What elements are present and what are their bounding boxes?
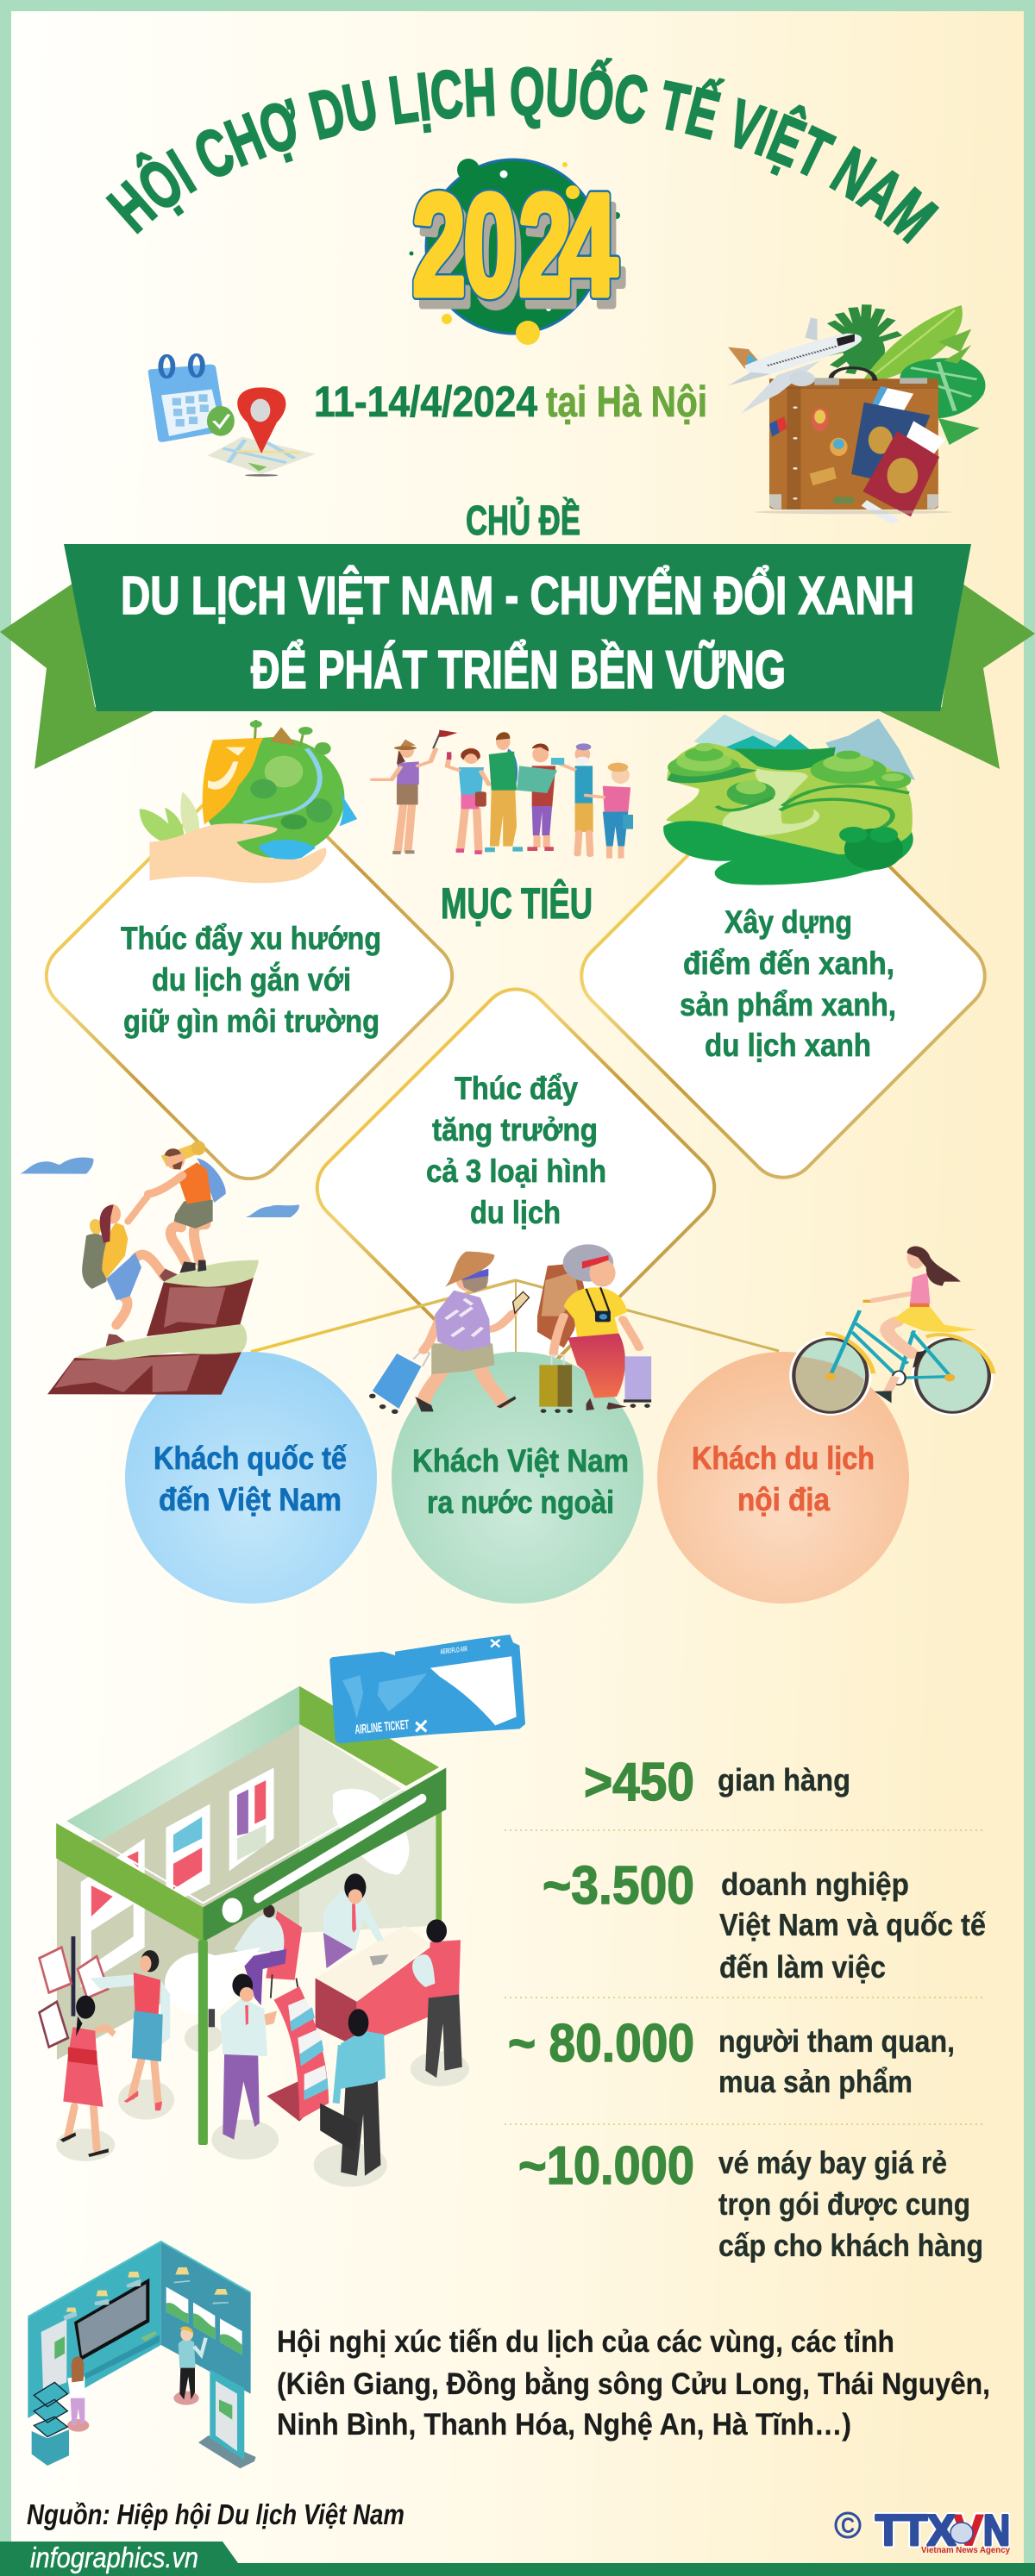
stat: businesses: doanh nghiệp: [721, 1866, 909, 1902]
shelf: [32, 2382, 69, 2466]
desk: [316, 1925, 430, 2047]
stat: visitors: người tham quan,: [718, 2023, 955, 2059]
screen: [74, 2279, 149, 2360]
panel: goal left diamond: du lịch gắn với: [152, 961, 351, 997]
icon: rice terraces and mountains: [663, 714, 915, 885]
booth walls: [57, 1724, 299, 2060]
year badge 2024: [409, 159, 624, 345]
logo: copyright and TTXVN: N: [983, 2506, 1010, 2554]
older man: [369, 1252, 530, 1414]
circle: domestic travellers: Khách du lịch: [692, 1441, 875, 1476]
man behind desk: [323, 1873, 384, 1968]
icon: hand holding green globe: [140, 720, 357, 883]
logo: copyright and TTXVN: C: [841, 2514, 855, 2538]
circle: international visitors: [125, 1352, 377, 1604]
circle: international visitors: đến Việt Nam: [159, 1482, 342, 1517]
panel: goal right diamond: điểm đến xanh,: [683, 946, 894, 981]
stat: businesses: đến làm việc: [719, 1949, 886, 1985]
illustration: exhibition booth: [40, 1686, 469, 2186]
banner text: [121, 566, 914, 700]
panel: goal right diamond: du lịch xanh: [705, 1028, 871, 1063]
older woman: [537, 1244, 651, 1413]
man: [148, 1141, 226, 1273]
stat: stands: >450: [584, 1753, 694, 1812]
gold connector lines from centre diamond to circles: [251, 1280, 779, 1355]
clouds: [20, 1157, 299, 1217]
display stand: [40, 1936, 108, 2047]
year badge 2024: 2: [412, 164, 466, 326]
panel: goal right diamond: Xây dựng: [724, 904, 852, 940]
illustration: airline tickets: AIRLINE TICKET: [354, 1717, 410, 1738]
logo: copyright and TTXVN: N: [983, 2506, 1010, 2554]
footer tab: infographics.vn: infographics.vn: [30, 2542, 198, 2573]
stat: stands: gian hàng: [718, 1762, 850, 1798]
posters: [81, 1767, 274, 1987]
upper rock: [147, 1278, 254, 1336]
tourist in green top: [485, 732, 523, 852]
stat: air tickets: trọn gói được cung: [718, 2186, 970, 2222]
woman in red dress: [56, 1996, 115, 2161]
body text: promotion conferences: [277, 2325, 990, 2442]
year badge 2024: 0: [463, 164, 517, 326]
tourist holding map: [517, 743, 557, 851]
panel: goal centre diamond: [303, 975, 729, 1400]
stat: visitors: mua sản phẩm: [718, 2064, 913, 2099]
panel: goal centre diamond: Thúc đẩy: [455, 1071, 578, 1106]
circle: outbound Vietnamese travellers: [392, 1352, 643, 1604]
year badge 2024: 2: [418, 174, 472, 336]
illustration: promotion booth: [28, 2241, 256, 2468]
illustration: airline tickets: AEROFLO AIR: [440, 1645, 467, 1656]
guide with flag: [373, 730, 457, 854]
man with briefcase: [314, 2009, 387, 2186]
lower rock: [47, 1352, 242, 1395]
panel: goal right diamond: sản phẩm xanh,: [680, 987, 896, 1022]
woman: [82, 1197, 178, 1347]
source note: Nguồn: Hiệp hội Du lịch Việt Nam: [27, 2498, 405, 2530]
logo: copyright and TTXVN: [836, 2506, 1010, 2555]
tourist in cyan top: [447, 747, 489, 854]
title: HỘI CHỢ DU LỊCH QUỐC TẾ VIỆT NAM: [105, 57, 940, 245]
circle: domestic travellers: nội địa: [737, 1482, 830, 1517]
stat: visitors: ~ 80.000: [508, 2014, 694, 2073]
panel: goal left diamond: [32, 759, 467, 1193]
date text: tại Hà Nội: [546, 378, 707, 426]
illustration: hikers on a cliff: [20, 1141, 299, 1395]
year badge 2024: 0: [463, 164, 517, 326]
icon: suitcase, plane, passports and leaves: [728, 304, 985, 524]
date text: 11-14/4/2024: [314, 378, 537, 426]
rider: [886, 1377, 895, 1397]
man at desk in red vest: [411, 1919, 469, 2086]
logo: copyright and TTXVN: V: [954, 2506, 984, 2554]
stat: air tickets: vé máy bay giá rẻ: [718, 2145, 947, 2180]
stat: air tickets: [518, 2136, 983, 2263]
year badge 2024: 2: [518, 164, 572, 326]
heading: goals: MỤC TIÊU: [441, 879, 593, 928]
year badge 2024: 4: [565, 174, 624, 336]
stat: visitors: [508, 2014, 955, 2099]
illustration: airline tickets: [329, 1635, 525, 1743]
panel: goal centre diamond: tăng trưởng: [432, 1112, 598, 1147]
bicycle wheels: [791, 1337, 870, 1415]
circle: outbound Vietnamese travellers: ra nước ngoài: [427, 1485, 614, 1520]
banner panel: [64, 544, 971, 711]
footer tab: infographics.vn: [0, 2542, 1035, 2576]
year badge 2024: 0: [469, 174, 523, 336]
panel: goal right diamond: [568, 760, 999, 1191]
panel: goal centre diamond: du lịch: [470, 1195, 561, 1230]
circle: international visitors: Khách quốc tế: [154, 1441, 347, 1476]
stat: air tickets: cấp cho khách hàng: [718, 2228, 983, 2263]
illustration: group of tourists: [373, 730, 633, 859]
logo: copyright and TTXVN: TTX: [875, 2506, 956, 2554]
kiosk: [198, 2369, 256, 2468]
icon: calendar and map pin: [148, 354, 316, 477]
brochure rack: [267, 1986, 329, 2122]
panel: goal left diamond: giữ gìn môi trường: [123, 1004, 380, 1039]
logo: copyright and TTXVN: Vietnam News Agency: [921, 2545, 1010, 2555]
visitor woman: [67, 2356, 89, 2432]
presenter: [173, 2327, 206, 2405]
stat: businesses: [543, 1856, 987, 1985]
circle: domestic travellers: [657, 1352, 909, 1604]
front beams and post: [56, 1823, 203, 1941]
wall posters: [166, 2287, 242, 2355]
grass: [164, 1260, 259, 1287]
centre man: [211, 1973, 279, 2160]
round table: [165, 1953, 236, 2015]
woman in pink top: [584, 763, 633, 859]
woman in blue skirt: [91, 1950, 174, 2120]
year badge 2024: 2: [518, 164, 572, 326]
body text: promotion conferences: Hội nghị xúc tiến du lịch của các vùng, các tỉnh: [277, 2325, 894, 2359]
year badge 2024: 2: [412, 164, 466, 326]
older tourist with camera: [551, 743, 593, 855]
stat: businesses: ~3.500: [543, 1856, 694, 1916]
heading: theme label: CHỦ ĐỀ: [466, 497, 580, 544]
panel: goal centre diamond: cả 3 loại hình: [426, 1154, 606, 1189]
frame: [831, 1310, 950, 1378]
year badge 2024: 4: [559, 164, 618, 326]
year badge 2024: 4: [559, 164, 618, 326]
logo: copyright and TTXVN: V: [954, 2506, 984, 2554]
stat: air tickets: ~10.000: [518, 2136, 694, 2196]
logo: copyright and TTXVN: TTX: [875, 2506, 956, 2554]
circle: outbound Vietnamese travellers: Khách Việt Nam: [412, 1443, 629, 1479]
ribbon ends: [0, 582, 1035, 769]
stat: stands: [584, 1753, 850, 1812]
date text: [314, 378, 707, 426]
illustration: cyclist: [791, 1246, 994, 1415]
banner ribbon with theme: [0, 544, 1035, 769]
illustration: older couple with luggage: [369, 1244, 651, 1414]
fenders: [825, 1334, 994, 1373]
body text: promotion conferences: Ninh Bình, Thanh Hóa, Nghệ An, Hà Tĩnh…): [277, 2408, 851, 2442]
year badge 2024: 2: [524, 174, 578, 336]
lamps: [63, 2279, 229, 2321]
panel: goal left diamond: Thúc đẩy xu hướng: [121, 921, 381, 956]
left poster: [41, 2319, 66, 2391]
seated woman: [210, 1904, 302, 2005]
banner text: ĐỂ PHÁT TRIỂN BỀN VỮNG: [251, 641, 786, 700]
stat: businesses: Việt Nam và quốc tế: [719, 1907, 987, 1942]
back post: [436, 1810, 442, 1925]
